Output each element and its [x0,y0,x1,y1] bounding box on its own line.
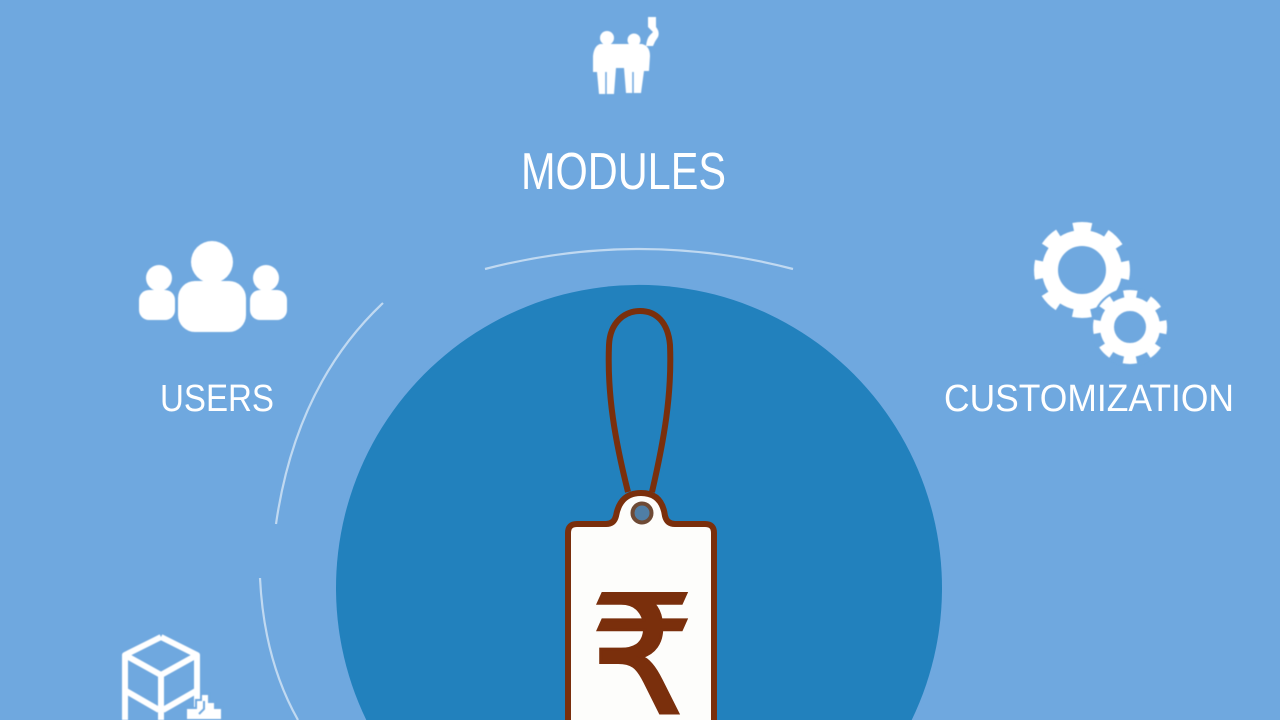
icon: storage box with puzzle piece [125,637,222,720]
heading: modules: MODULES [521,143,726,201]
tag body [568,493,714,720]
heading: users: USERS [160,378,274,420]
arc: top [485,249,793,269]
tag string loop [609,311,670,492]
icon: gears [1039,227,1169,366]
icon: users [139,241,287,332]
icon: modules people [593,17,659,94]
central circle [336,285,942,720]
arc: upper left [276,303,383,524]
price tag [568,311,714,720]
arc: lower left [260,578,298,720]
heading: customization: CUSTOMIZATION [944,378,1234,420]
tag eyelet [632,504,652,522]
